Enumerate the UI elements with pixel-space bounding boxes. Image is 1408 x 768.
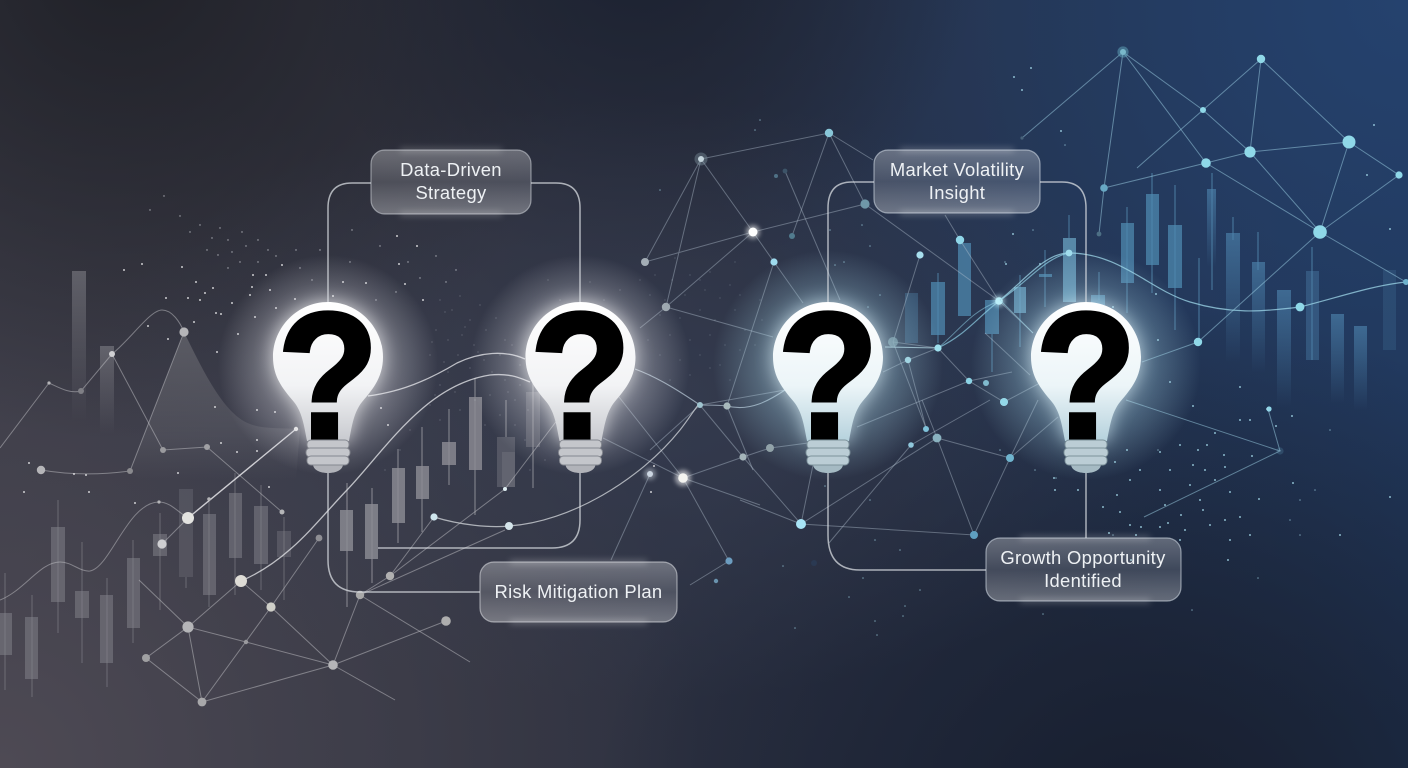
area chart mountain <box>130 332 300 480</box>
label: Growth Opportunity Identified <box>986 538 1181 601</box>
label: Risk Mitigation Plan: Risk Mitigation Plan <box>495 581 662 602</box>
label: Data-Driven Strategy: Strategy <box>415 182 487 203</box>
candlestick chart: middle grey <box>340 370 540 607</box>
star particles <box>24 68 1390 635</box>
icon: question bulb 3: ? <box>777 275 879 477</box>
network: centre <box>430 129 1284 585</box>
network: left grey <box>0 310 580 706</box>
label: Market Volatility Insight: Insight <box>929 182 985 203</box>
label: Risk Mitigation Plan <box>480 562 677 622</box>
network: top right <box>1000 46 1408 517</box>
bulb glows <box>218 250 1201 480</box>
candlestick chart: left grey <box>0 271 291 697</box>
label: Growth Opportunity Identified: Growth Opportunity <box>1000 547 1166 568</box>
label: Data-Driven Strategy: Data-Driven <box>400 159 502 180</box>
icon: question bulb 4: ? <box>1035 275 1137 477</box>
connector lines <box>328 182 1086 592</box>
label: Market Volatility Insight <box>874 150 1040 213</box>
label: Data-Driven Strategy <box>371 150 531 214</box>
icon: question bulb 2: ? <box>530 275 631 477</box>
label: Growth Opportunity Identified: Identified <box>1044 570 1122 591</box>
candlestick chart: right blue <box>905 173 1396 410</box>
label: Market Volatility Insight: Market Volatility <box>890 159 1025 180</box>
icon: question bulb 1: ? <box>277 275 379 477</box>
bright node glows <box>644 225 1005 486</box>
